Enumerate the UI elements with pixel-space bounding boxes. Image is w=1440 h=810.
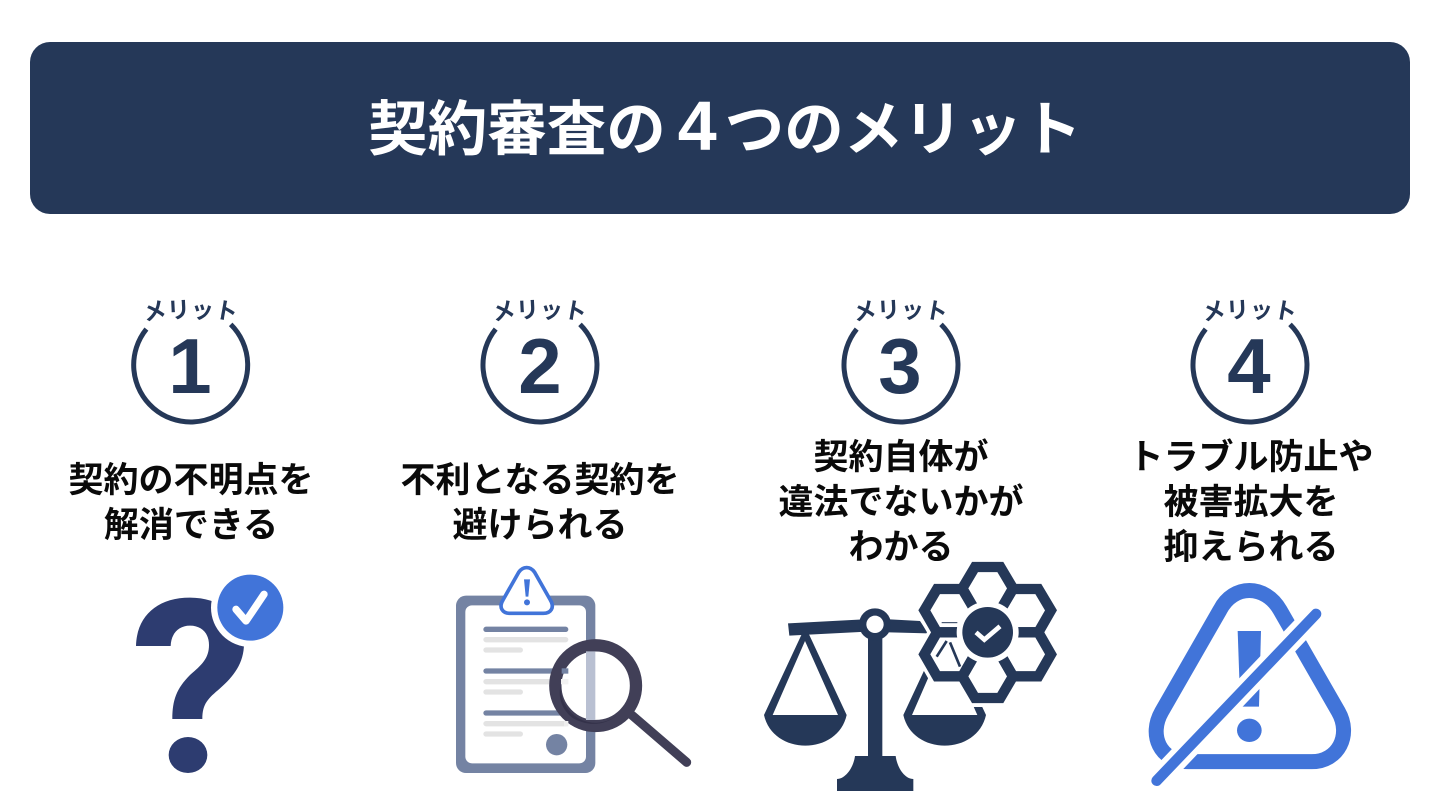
badge: merit 2: ト	[561, 290, 590, 328]
icon: question mark with check badge	[136, 574, 284, 773]
caption: merit 1: 契約の不明点を	[68, 452, 314, 503]
icon: crossed-out warning triangle	[1148, 583, 1352, 786]
badge: merit 1: リ	[166, 290, 191, 326]
badge: merit 1: ト	[212, 290, 241, 328]
badge: merit 3: 3	[878, 322, 922, 410]
caption: merit 3: 違法でないかが	[778, 474, 1024, 525]
warning triangle	[501, 568, 552, 613]
scales	[764, 608, 986, 791]
caption: merit 2: 不利となる契約を	[401, 452, 679, 503]
badge: merit 2: 2	[518, 322, 562, 410]
badge: merit 1: ッ	[190, 290, 215, 326]
badge: merit 4: ッ	[1249, 290, 1274, 326]
badge: merit 4: ト	[1271, 290, 1300, 328]
magnifier	[555, 645, 687, 762]
caption: merit 4: トラブル防止や	[1128, 429, 1374, 480]
caption: merit 3	[778, 429, 1024, 570]
badge: merit 1: メ	[140, 290, 169, 328]
badge: merit 3: ッ	[900, 290, 925, 326]
header banner	[30, 42, 1410, 214]
badge: merit 1: 1	[168, 322, 212, 410]
icon: document with warning and magnifier	[456, 566, 692, 773]
badge: merit 3: ト	[922, 290, 951, 328]
caption: merit 2	[401, 452, 679, 548]
badge: merit 4: 4	[1227, 322, 1271, 410]
badge: merit 4: メ	[1199, 290, 1228, 328]
badge: merit 2: メ	[489, 290, 518, 328]
caption: merit 4: 被害拡大を	[1163, 474, 1338, 525]
caption: merit 4: 抑えられる	[1163, 519, 1338, 570]
badge: merit 3: メ	[850, 290, 879, 328]
caption: merit 3: わかる	[848, 519, 954, 570]
caption: merit 4	[1128, 429, 1374, 570]
hexagon cluster	[924, 566, 1051, 698]
caption: merit 2: 避けられる	[452, 497, 628, 548]
badge: merit 4: リ	[1225, 290, 1250, 326]
caption: merit 1	[68, 452, 314, 548]
badge: merit 2: ッ	[539, 290, 564, 326]
caption: merit 1: 解消できる	[104, 497, 278, 548]
caption: merit 3: 契約自体が	[813, 429, 988, 480]
badge: merit 3: リ	[876, 290, 901, 326]
badge: merit 2: リ	[515, 290, 540, 326]
title: 契約審査の4つのメリット	[368, 82, 1082, 168]
icon: scales of justice with hexagon check	[764, 562, 1057, 791]
